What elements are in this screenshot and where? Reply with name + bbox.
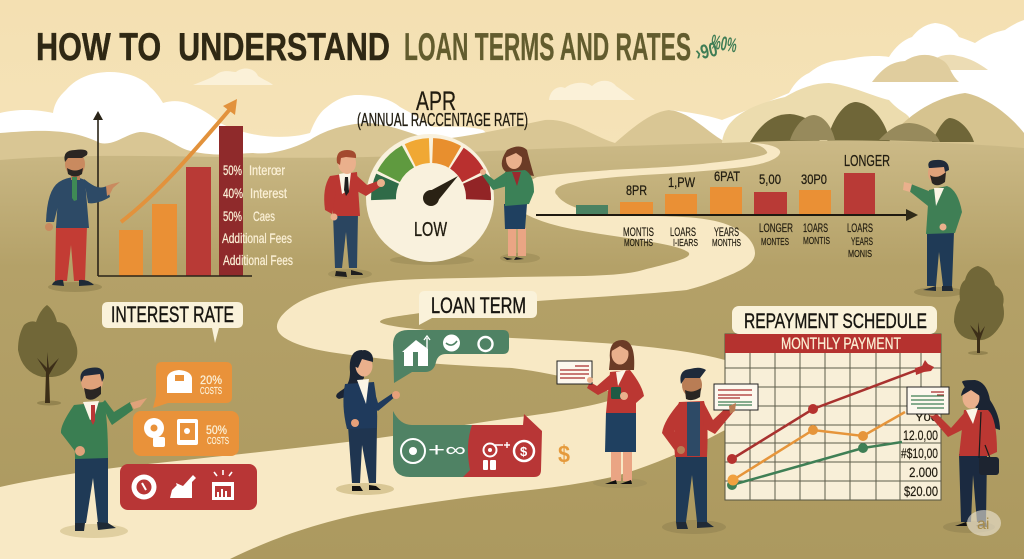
interest rate callout: INTEREST RATE [111,302,234,327]
tan cloud upper right [872,55,959,82]
bar bottom labels: MONTHS [712,238,741,249]
small cloud centre [193,69,273,85]
pale hills centre right [722,83,909,150]
card held up [907,387,949,414]
person: man in red jacket with card [662,368,758,534]
bar bottom labels: MONIS [848,249,872,260]
bar top labels: 30P0 [801,171,827,187]
chart legend: 50% [223,208,242,224]
icon: target and bars [483,442,510,470]
table values: 2.000 [909,464,938,480]
bar bottom labels: MONTIS [803,236,830,247]
bar top labels: LONGER [844,153,890,170]
orange cost bubble 20%: 20% [200,373,222,387]
tree right [954,266,1004,355]
person: woman in navy suit [336,350,400,495]
chart legend: Interœr [249,162,285,178]
gauge needle [428,176,458,203]
table values: #$10,00 [901,445,938,461]
table values [901,412,938,499]
icon: ring [478,337,492,351]
winding road [0,143,780,559]
bar bottom labels: LOARS [670,225,696,239]
ground [0,140,1024,559]
orange cost bubble 50%: COSTS [207,436,229,447]
interest rate callout [102,302,243,343]
chart bars [119,126,243,276]
person: man in green jacket at right [903,160,964,297]
repayment schedule table [725,334,941,500]
far hills left [0,110,760,200]
bar bottom labels: 1OARS [803,221,828,235]
icon: house badge [167,370,192,393]
title: HOW TO UNDERSTAND [36,26,390,69]
chart legend: 40% [223,185,243,201]
tan hill far right [880,93,1024,160]
bar bottom labels: MONTIS [623,225,654,239]
timeline arrow [536,209,918,221]
chart legend: 50% [223,162,242,178]
chart legend: Additional Fees [222,230,292,246]
bar top labels: 5,00 [759,171,781,187]
repayment schedule heading [732,306,937,334]
icon: dollar cycle: $ [520,444,528,459]
red trend line [727,360,934,464]
orange cost bubble 50% [133,411,239,456]
ai watermark badge: ai [977,516,989,533]
icon: green percent flourish: ›90 [693,39,720,65]
ai watermark badge [967,510,1001,536]
table values: Y00 [915,412,938,424]
chart axes [98,118,252,276]
table values: $20.00 [904,483,938,499]
bar bottom labels [623,221,873,260]
dollar sign: $ [558,441,571,468]
header label: MONTHLY PAYMENT [781,334,901,353]
icon: leaf badge [443,334,460,352]
icon: rising chart [170,475,196,498]
icon: gear and box [144,418,165,447]
icon: piggy circle [401,439,425,463]
chart legend: Interest [250,185,287,201]
bar bottom labels: MONTHS [624,238,653,249]
bar top labels: 8PR [626,182,647,198]
icon: green percent flourish [693,31,739,65]
small cloud right of centre [549,81,635,100]
bar bottom labels: YEARS [714,225,739,239]
bar bottom labels: LONGER [759,221,793,235]
person: woman in green jacket beside gauge [480,146,540,263]
dark tree-hills on horizon [750,102,974,142]
bar bottom labels: YEARS [851,236,873,248]
person: woman in red jacket with card [557,340,647,488]
loan term comparison bars [536,153,918,260]
card held up [557,361,592,384]
orange cost bubble 20%: COSTS [200,386,222,397]
red icon bar [120,464,257,510]
table values: 12.0,00 [903,427,938,443]
person: man in navy shirt pointing at chart [45,150,120,292]
bar bottom labels: MONTES [761,237,789,248]
white cloud right [660,20,1024,150]
bar top labels: 1,PW [668,174,696,190]
icon: tablet [177,419,198,445]
orange cost bubble 20% [153,362,232,408]
APR heading: APR [416,86,456,116]
loan term callout: LOAN TERM [431,293,526,318]
title: LOAN TERMS AND RATES [404,26,691,69]
icon: report board [212,470,234,500]
chart legend [222,162,293,268]
icon: house with arrows [402,336,430,366]
pale cloud upper right [925,55,988,70]
APR heading: (ANNUAL RACCENTAGE RATE) [357,110,528,130]
gauge label: LOW [414,219,447,241]
interest bar chart [93,99,293,276]
bar top labels: 6PAT [714,168,740,184]
title [36,26,691,69]
chart legend: Caes [253,208,275,224]
APR heading [357,86,528,130]
table header [725,334,941,353]
icon: green percent flourish: %0% [709,31,739,57]
person: man in red jacket beside gauge [324,150,385,279]
loan term callout [419,291,537,325]
repayment schedule heading: REPAYMENT SCHEDULE [744,310,927,333]
icon: dollar cycle [514,441,534,461]
person: man in green suit presenting [60,367,147,538]
orange cost bubble 50%: 50% [206,423,227,437]
green trend line [727,442,902,490]
APR gauge [366,134,494,262]
chart legend: Additional Fees [223,252,293,268]
loan term bubble lower [393,411,542,477]
icon: plus infinity: +∞ [428,440,466,461]
tree left [18,305,77,406]
icon: clock gear [132,474,156,500]
gauge shadow [390,255,474,265]
bar bottom labels: LOARS [847,221,873,235]
gauge hub [423,190,439,206]
rising arrow [121,99,237,222]
white cloud left [0,72,505,190]
green term bubble upper [393,330,509,383]
person: woman in red jacket with bag [907,380,1000,533]
term bars [576,173,875,214]
axis arrowhead [93,111,103,120]
bar top labels [626,153,890,198]
card held up [714,384,758,410]
orange trend line [728,412,905,486]
bar bottom labels: I-IEARS [673,238,698,249]
